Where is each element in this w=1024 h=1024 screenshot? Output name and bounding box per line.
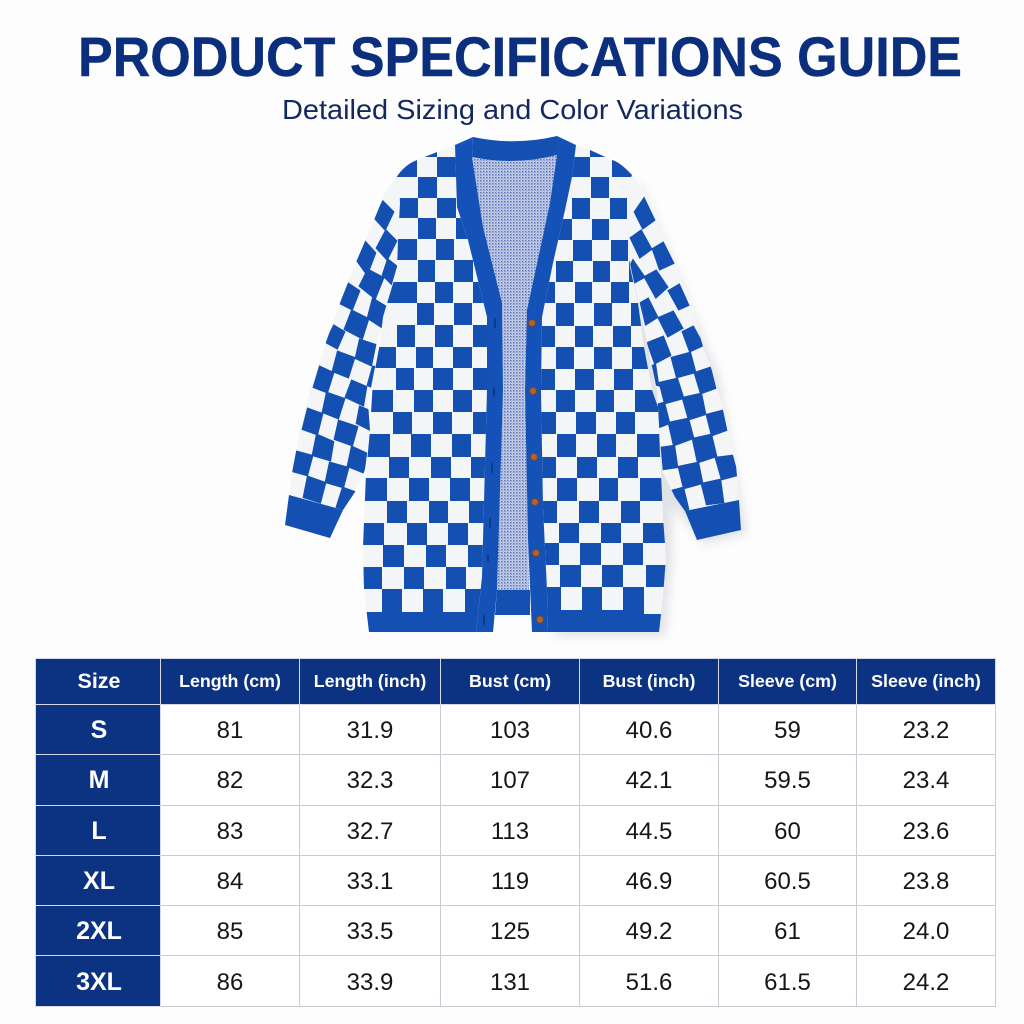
buttonholes: [484, 319, 495, 624]
size chart table: 86: [217, 969, 243, 996]
size chart table: 31.9: [347, 717, 393, 744]
size chart table: Sleeve (inch): [871, 671, 981, 691]
size chart table: 82: [217, 767, 243, 794]
illustration: checkered cardigan: [285, 136, 748, 638]
size chart table: 84: [217, 868, 243, 895]
size chart table: 40.6: [626, 717, 672, 744]
right placket: [525, 136, 576, 632]
right sleeve: [628, 176, 739, 511]
size chart table: S: [91, 716, 107, 744]
size chart table: 131: [490, 969, 530, 996]
size chart table: 60: [774, 818, 801, 845]
size chart table: 61: [774, 918, 801, 945]
size chart table: 44.5: [626, 818, 672, 845]
size chart table: 33.1: [347, 868, 393, 895]
size chart table: 46.9: [626, 868, 672, 895]
size chart table: 81: [217, 717, 243, 744]
size chart table: 103: [490, 717, 530, 744]
size chart table: L: [91, 817, 107, 845]
size chart table: 61.5: [764, 969, 811, 996]
size chart table: 119: [491, 868, 529, 895]
size chart table: XL: [83, 867, 115, 895]
right front checker panel: [541, 146, 666, 632]
buttons: [528, 320, 544, 623]
size chart table: 23.4: [903, 767, 949, 794]
size chart table: 60.5: [764, 868, 811, 895]
size chart table: Bust (cm): [469, 671, 551, 691]
size chart table: 113: [491, 818, 529, 845]
left sleeve: [289, 178, 400, 510]
lining: [472, 155, 557, 592]
size chart table: 3XL: [76, 968, 122, 996]
size chart table: 32.7: [347, 818, 393, 845]
size chart table: 83: [217, 818, 243, 845]
cardigan drop shadow: [554, 179, 747, 636]
size chart table: Sleeve (cm): [738, 671, 837, 691]
left placket: [455, 137, 503, 632]
title: PRODUCT SPECIFICATIONS GUIDE: [78, 25, 962, 88]
size chart table: 23.6: [903, 818, 949, 845]
size chart table: 49.2: [626, 918, 672, 945]
size chart table: 33.9: [347, 969, 393, 996]
inner hem rib: [495, 590, 530, 615]
size chart table: 85: [217, 918, 243, 945]
size chart table: Size: [77, 669, 121, 693]
size chart table: 51.6: [626, 969, 672, 996]
size chart table: [35, 658, 996, 1007]
right sleeve cuff: [685, 500, 741, 540]
size chart table: 24.2: [903, 969, 949, 996]
size chart table: 23.2: [903, 717, 949, 744]
size chart table: 125: [490, 918, 530, 945]
size chart table: 59.5: [764, 767, 811, 794]
size chart table: 23.8: [903, 868, 949, 895]
size chart table: 33.5: [347, 918, 393, 945]
collar: [472, 136, 557, 161]
size chart table: M: [89, 766, 109, 794]
size chart table: Length (cm): [179, 671, 281, 691]
left front checker panel: [363, 146, 487, 632]
size chart table: 42.1: [626, 767, 672, 794]
size chart table: 24.0: [903, 918, 949, 945]
size chart table: 107: [490, 767, 530, 794]
size chart table: 2XL: [76, 917, 122, 945]
size chart table: Bust (inch): [603, 671, 695, 691]
left sleeve cuff: [285, 495, 343, 538]
size chart table: Length (inch): [314, 671, 426, 691]
size chart table: 59: [774, 717, 801, 744]
subtitle: Detailed Sizing and Color Variations: [282, 94, 743, 125]
size chart table: 32.3: [347, 767, 393, 794]
